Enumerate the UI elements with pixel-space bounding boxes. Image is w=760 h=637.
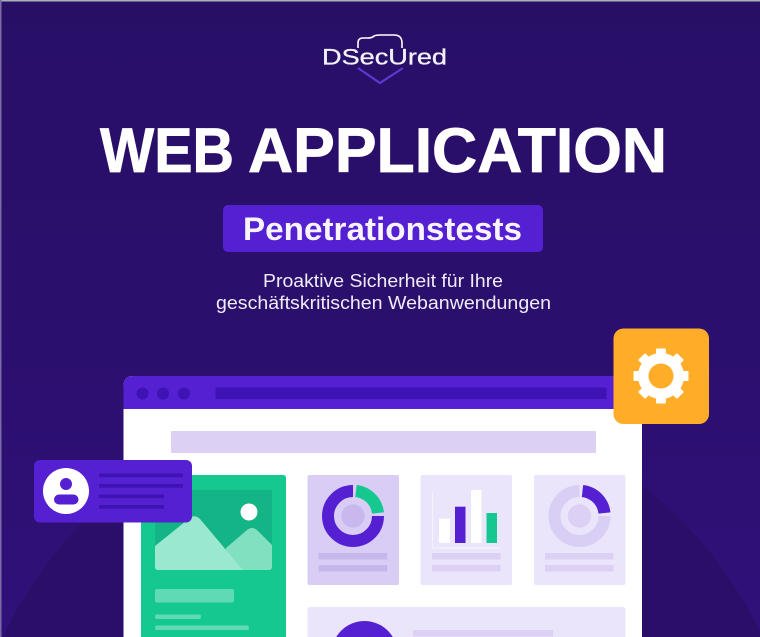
user profile card <box>34 460 192 522</box>
browser window <box>124 376 642 637</box>
title: WEB <box>100 116 234 186</box>
title: APPLICATION <box>248 116 667 186</box>
card: bar chart <box>420 475 512 585</box>
badge: Penetrationstests <box>223 205 543 252</box>
image card <box>141 475 286 637</box>
icon: gear <box>634 348 688 404</box>
subtitle: geschäftskritischen Webanwendungen <box>216 292 551 313</box>
bottom card with avatar <box>308 607 626 637</box>
badge: Penetrationstests: Penetrationstests <box>243 211 522 247</box>
logo: DSecured: DSecUred <box>322 44 447 70</box>
settings card <box>614 328 709 424</box>
header bar <box>171 431 596 453</box>
card: donut chart purple and green <box>308 475 399 585</box>
subtitle: Proaktive Sicherheit für Ihre <box>263 270 503 291</box>
icon: user avatar <box>43 468 89 514</box>
logo: DSecured <box>322 35 447 83</box>
browser title bar <box>124 376 642 409</box>
card: donut chart light <box>534 475 626 585</box>
subtitle <box>216 270 551 313</box>
